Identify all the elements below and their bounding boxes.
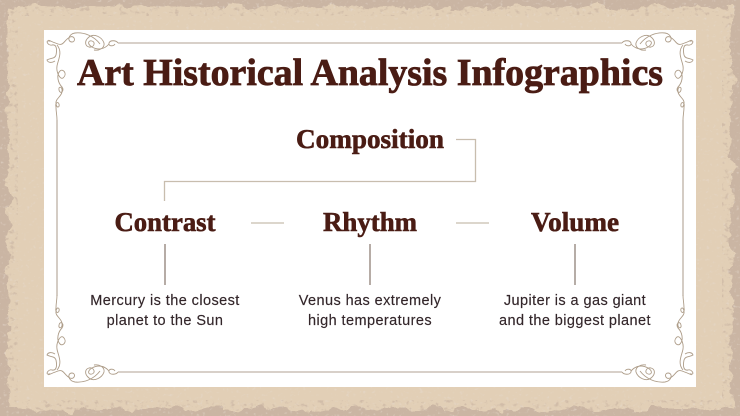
text: Contrast description: Mercury is the closest <box>90 293 240 309</box>
ornamental frame <box>47 33 693 382</box>
connector: Composition to Contrast <box>164 140 476 201</box>
connector: Contrast to Rhythm <box>251 222 284 224</box>
text: Rhythm description: high temperatures <box>308 313 432 329</box>
heading: Rhythm: Rhythm <box>323 207 418 237</box>
connector: Rhythm to Volume <box>456 222 489 224</box>
vertical connector <box>369 244 371 285</box>
panel: white card <box>44 30 696 387</box>
text: Volume description: Jupiter is a gas giant <box>504 293 646 309</box>
vertical connector <box>164 244 166 285</box>
ornament: bottom-right corner <box>622 295 693 382</box>
column: Volume <box>499 207 651 329</box>
vertical connector <box>574 244 576 285</box>
ornament: top-left corner <box>47 33 118 120</box>
title: Art Historical Analysis Infographics <box>77 52 663 94</box>
text: Contrast description: planet to the Sun <box>107 313 223 329</box>
heading: Composition: Composition <box>296 124 444 154</box>
heading: Volume: Volume <box>531 207 619 237</box>
column: Rhythm <box>299 207 442 329</box>
ornament: bottom-left corner <box>47 295 118 382</box>
column: Contrast <box>90 207 240 329</box>
ornament: top-right corner <box>622 33 693 120</box>
text: Rhythm description: Venus has extremely <box>299 293 442 309</box>
heading: Contrast: Contrast <box>114 207 216 237</box>
text: Volume description: and the biggest planet <box>499 313 651 329</box>
